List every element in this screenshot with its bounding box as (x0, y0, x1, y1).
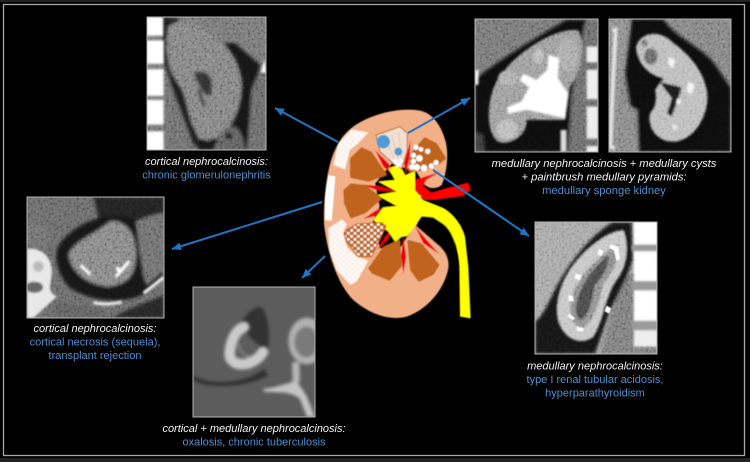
pyramid (370, 241, 400, 279)
renal pelvis and ureter (373, 164, 471, 318)
interlobar vessels (362, 139, 439, 274)
CT image: axial kidney with cortical calcifications (28, 198, 164, 318)
frame (147, 17, 266, 150)
CT image: coronal kidney with medullary cysts (610, 20, 730, 152)
caption (527, 360, 663, 400)
CT image: axial kidney with C-shaped calcification and vertebra (194, 288, 314, 416)
caption: medullary sponge kidney (542, 185, 666, 197)
caption: transplant rejection (49, 350, 141, 362)
frame (27, 197, 164, 318)
arrow to cortical necrosis image (172, 202, 322, 249)
cortical calcification: lower pole (328, 219, 368, 285)
caption (162, 423, 346, 448)
CT image: coronal kidney with medullary calcifications (536, 222, 656, 354)
CT image: coronal enhanced kidney with bright collecting system (476, 20, 598, 152)
caption: cortical nephrocalcinosis: (145, 156, 268, 168)
renal artery (415, 171, 471, 200)
caption: + paintbrush medullary pyramids: (521, 172, 687, 184)
frame (475, 19, 598, 152)
arrow to medullary sponge kidney images (408, 98, 470, 133)
panel: medullary nephrocalcinosis, renal tubular acidosis (527, 221, 663, 400)
caption (142, 156, 271, 182)
caption: oxalosis, chronic tuberculosis (182, 436, 326, 448)
frame (609, 19, 731, 152)
pyramid with dense medullary calcification (343, 223, 386, 257)
caption: cortical necrosis (sequela), (30, 336, 160, 348)
frame (193, 287, 315, 417)
pyramid (409, 241, 438, 280)
caption: hyperparathyroidism (545, 388, 645, 400)
caption (492, 158, 717, 197)
arrow to chronic glomerulonephritis image (275, 108, 338, 142)
CT image: coronal kidney with spine (148, 18, 266, 150)
pyramid with medullary cysts (376, 127, 407, 169)
caption: cortical + medullary nephrocalcinosis: (162, 423, 346, 435)
calcified medullary foci (568, 245, 620, 332)
caption: type I renal tubular acidosis, (527, 374, 663, 386)
arrow to renal tubular acidosis image (433, 170, 529, 236)
pyramid (351, 149, 385, 180)
caption: cortical nephrocalcinosis: (34, 323, 156, 335)
caption: chronic glomerulonephritis (142, 170, 271, 182)
renal parenchyma (324, 110, 449, 318)
cortical calcification: upper pole (333, 129, 368, 169)
kidney diagram (324, 110, 471, 318)
panel: cortical nephrocalcinosis, cortical necrosis (26, 197, 164, 362)
cortical calcification: band (325, 175, 335, 221)
arrow to oxalosis image (302, 256, 325, 278)
caption (30, 323, 160, 362)
panel: cortical and medullary nephrocalcinosis (162, 287, 346, 448)
panel: cortical nephrocalcinosis, chronic glomerulonephritis (142, 17, 271, 182)
pyramid (345, 185, 380, 217)
renal sinus (373, 163, 425, 248)
frame (535, 222, 657, 354)
caption: medullary nephrocalcinosis + medullary cysts (492, 158, 717, 170)
hilum gap (415, 217, 457, 258)
pyramid with punctate calcifications (409, 139, 445, 171)
caption: medullary nephrocalcinosis: (527, 360, 663, 372)
panel: medullary sponge kidney (475, 19, 731, 197)
